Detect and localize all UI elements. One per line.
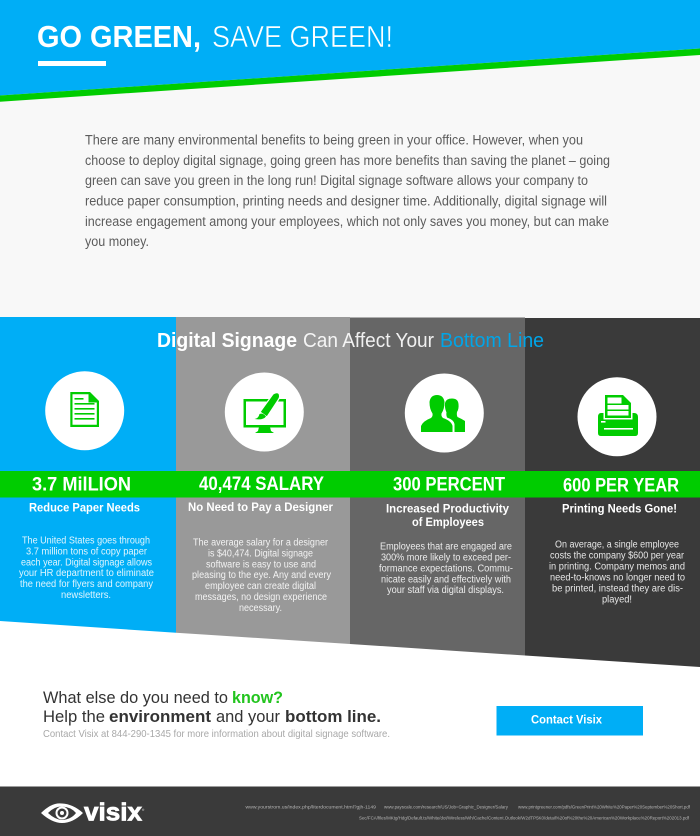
column text: paper: The United States goes through: [22, 535, 150, 546]
column heading: productivity: Increased Productivity: [386, 502, 509, 516]
column text: paper: 3.7 million tons of copy paper: [26, 546, 148, 557]
page background: [0, 0, 700, 318]
stat: percent: 300 PERCENT: [393, 474, 505, 496]
call to action text: know?: [232, 688, 283, 707]
column heading: paper: Reduce Paper Needs: [29, 501, 140, 515]
contact button: [496, 706, 643, 736]
section heading: [157, 329, 544, 352]
column text: printing: costs the company $600 per year: [550, 551, 685, 562]
column text: designer: is $40,474. Digital signage: [208, 548, 313, 559]
header banner: [0, 0, 700, 102]
column heading: printing: Printing Needs Gone!: [562, 502, 677, 516]
panel: designer background: [176, 317, 350, 644]
column text: productivity: nicate easily and effectively with: [381, 574, 511, 585]
column text: productivity: 300% more likely to exceed per-: [381, 552, 511, 563]
column text: printing: On average, a single employee: [555, 540, 680, 551]
call to action text: Help the: [43, 707, 105, 726]
stat: per year: 600 PER YEAR: [563, 475, 679, 497]
logo: ®: [142, 808, 145, 812]
column text: productivity: formance expectations. Commu-: [379, 563, 513, 574]
footer sources: www.payscale.com/research/US/Job=Graphic_Designer/Salary: [384, 804, 509, 810]
column text: printing: in printing. Company memos and: [549, 562, 685, 573]
column heading: productivity: of Employees: [412, 515, 484, 529]
column text: designer: messages, no design experience: [195, 592, 328, 603]
column text: printing: be printed, instead they are dis-: [552, 584, 683, 595]
call to action text: bottom line.: [285, 707, 381, 726]
intro paragraph: increase engagement among your employees, which not only saves you money, but can make: [85, 214, 609, 230]
column text: designer: The average salary for a designer: [193, 537, 329, 548]
intro paragraph: green can save you green in the long run! Digital signage software allows your company to: [85, 173, 588, 189]
call to action text: What else do you need to: [43, 688, 228, 707]
intro paragraph: choose to deploy digital signage, going green has more benefits than saving the planet – going: [85, 153, 610, 169]
panel: printing background: [525, 318, 700, 667]
column text: productivity: Employees that are engaged are: [380, 541, 513, 552]
footer sources: www.printgreener.com/pdfs/GreenPrint%20White%20Paper%20September%20Short.pdf: [518, 804, 691, 810]
icon: printer: [578, 377, 656, 456]
section heading: Can Affect Your: [303, 329, 434, 352]
icon: document: [45, 371, 124, 450]
logo: visix: [84, 799, 142, 827]
intro paragraph: [85, 132, 610, 250]
column text: paper: newsletters.: [61, 590, 111, 601]
column text: printing: played!: [602, 595, 632, 606]
panel: productivity background: [350, 318, 525, 656]
column text: productivity: your staff via digital displays.: [387, 585, 504, 596]
title: SAVE GREEN!: [212, 19, 393, 54]
column text: printing: need-to-knows no longer need to: [550, 573, 686, 584]
column text: paper: each year. Digital signage allows: [21, 557, 152, 568]
column heading: designer: No Need to Pay a Designer: [188, 500, 333, 514]
column text: paper: your HR department to eliminate: [19, 568, 155, 579]
intro paragraph: There are many environmental benefits to being green in your office. However, when you: [85, 132, 583, 148]
section heading: Digital Signage: [157, 329, 297, 352]
column text: designer: necessary.: [239, 603, 282, 614]
green stat band: [0, 471, 700, 498]
section heading: Bottom Line: [440, 329, 544, 352]
column text: designer: [192, 537, 331, 614]
column text: designer: software is easy to use and: [206, 559, 316, 570]
stat: salary: 40,474 SALARY: [199, 473, 324, 495]
footer sources: www.yourstrom.us/index.php/literdocument.html?gjh-1149: [246, 804, 376, 810]
title: [37, 19, 393, 54]
title: GO GREEN,: [37, 19, 201, 54]
contact button: Contact Visix: [531, 712, 602, 726]
intro paragraph: you money.: [85, 234, 149, 250]
column heading: productivity: [386, 502, 509, 529]
title underline: [38, 61, 106, 66]
footer sources: [246, 804, 691, 820]
column text: designer: employee can create digital: [205, 581, 316, 592]
logo: [41, 799, 145, 827]
stat: paper: 3.7 MilLION: [32, 473, 131, 495]
column text: printing: [549, 540, 686, 606]
call to action text: environment: [109, 707, 211, 726]
column text: paper: [19, 535, 155, 601]
call to action text: and your: [216, 707, 280, 726]
call to action text: Contact Visix at 844-290-1345 for more information about digital signage software.: [43, 728, 390, 740]
footer bar: [0, 786, 700, 836]
call to action text: [43, 688, 390, 740]
icon: monitor and brush: [225, 372, 304, 452]
column text: designer: pleasing to the eye. Any and every: [192, 570, 331, 581]
icon: people: [405, 374, 484, 452]
footer sources: Sec/FCA/files/MKtg/Hdg/Default.ts/White/dot/Wireless/Wh/Cache/Content.Outlook/W2dTP5K0/detail%20of%20the%20American%20Workplace%20Report%202013.pdf: [359, 816, 690, 820]
intro paragraph: reduce paper consumption, printing needs and designer time. Additionally, digital signage will: [85, 194, 607, 210]
panel: reduce paper background: [0, 317, 176, 633]
column text: paper: the need for flyers and company: [20, 579, 153, 590]
column text: productivity: [379, 541, 513, 596]
